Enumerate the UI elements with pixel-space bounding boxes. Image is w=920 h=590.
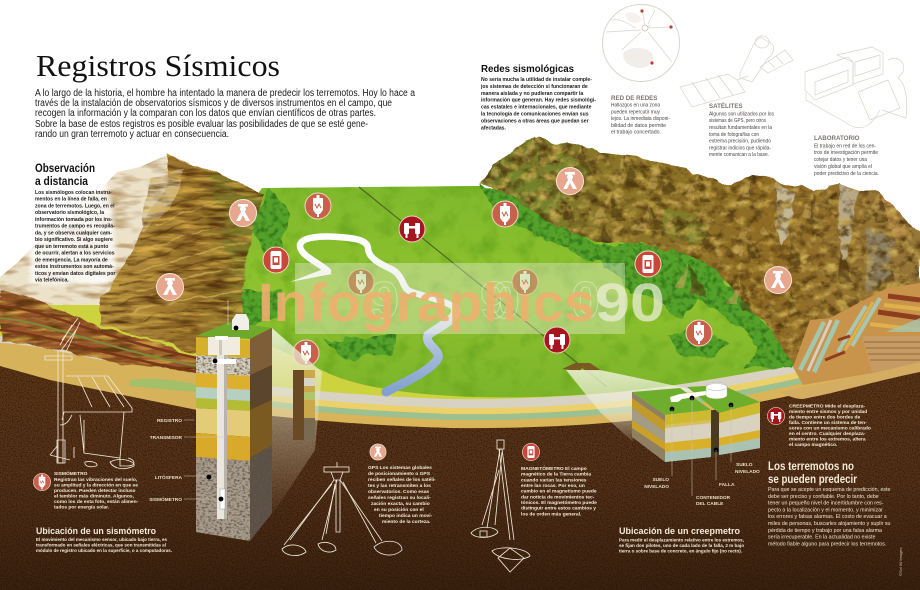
panel: Magnetómetro: los de orden más general.	[521, 511, 582, 517]
panel: Laboratorio: poder predictivo de la ciencia.	[814, 171, 879, 177]
panel: Observación a distancia: trumentos de campo es recopila-	[35, 224, 115, 230]
panel: Observación a distancia: de emergencia. La mayoría de	[35, 258, 108, 264]
green top	[196, 322, 272, 339]
panel: Sismómetro: SISMÓMETRO	[54, 469, 88, 477]
panel: Los terremotos no se pueden predecir: pecto a la localización y el momento, y minimizar	[768, 507, 883, 513]
panel: Los terremotos no se pueden predecir: pérdida de tiempo y trabajo por una falsa alarma	[768, 528, 882, 534]
hut	[232, 314, 249, 330]
panel: GPS: GPS Los sistemas globales	[368, 465, 432, 471]
image credit: ©Sol 90 Images	[898, 547, 903, 576]
panel: Sismómetro	[33, 469, 139, 510]
panel: Redes sismológicas: la tecnología de comunicaciones envían sus	[481, 112, 589, 118]
panel: Red de redes: bilidad de datos permite	[611, 123, 666, 129]
panel: Sismómetro: tados por energía solar.	[54, 504, 110, 510]
panel: Laboratorio: tros de investigación permite	[814, 150, 878, 156]
panel: Redes sismológicas: afectadas.	[481, 125, 507, 131]
panel: Laboratorio: LABORATORIO	[814, 135, 860, 142]
panel: Satélites: Algunos son utilizados por los	[709, 112, 774, 118]
panel: Los terremotos no se pueden predecir: los errores y falsas alarmas. El costo de evacuar a	[768, 514, 887, 520]
intro text: rando un gran terremoto y actuar en consecuencia.	[35, 129, 229, 140]
panel: Ubicación de un creepmetro: se fijan dos pilotes, uno de cada lado de la falla, 2 m bajo	[619, 543, 744, 548]
right mountains	[480, 136, 920, 368]
left block	[632, 388, 711, 415]
icon: laboratory workstation	[805, 47, 907, 128]
panel: Los terremotos no se pueden predecir: miles de personas, buscarles alojamiento y suplir su	[768, 521, 891, 527]
panel: Creepmetro: el campo magnético.	[789, 442, 838, 448]
panel: Ubicación de un sismómetro	[36, 526, 172, 553]
icon: world map globe	[602, 4, 680, 82]
panel: Observación a distancia: de ocurrir, alertan a los servicios	[35, 251, 115, 257]
front strata	[196, 337, 250, 358]
panel: Observación a distancia: ticos y envían datos digitales por	[35, 271, 115, 277]
panel: Observación a distancia: información tomada por los ins-	[35, 217, 113, 223]
panel: Observación a distancia: mentos en la línea de falla, en	[35, 197, 107, 203]
panel: Magnetómetro: tónicos. El magnetómetro puede	[521, 500, 597, 506]
panel: Creepmetro: de tiempo entre dos bordes de	[789, 414, 860, 420]
creepmeter block diagram	[632, 382, 760, 462]
intro text: recogen la información y la comparan con los datos que envían científicos de otras partes.	[35, 108, 376, 119]
olive slopes	[490, 150, 710, 245]
panel: Redes sismológicas: manera aislada y no pudieran compartir la	[481, 91, 583, 97]
panel: GPS: zación exacta, su cambio	[371, 501, 430, 507]
panel: Red de redes	[611, 95, 670, 136]
text halo	[30, 162, 116, 284]
fault line	[359, 187, 607, 387]
panel: Redes sismológicas: jos sistemas de detección si funcionaran de	[480, 84, 588, 90]
dots	[234, 326, 238, 330]
panel: Observación a distancia: bio significativo. Si algo sugiere	[35, 237, 113, 243]
creepmeter labels: SUELO	[736, 462, 753, 468]
right sand edge	[780, 362, 920, 399]
panel: Creepmetro: CREEPMETRO Mide el desplaza-	[789, 404, 865, 410]
panel: Los terremotos no se pueden predecir: debe ser preciso y confiable. Por lo tanto, debe	[768, 494, 879, 500]
creepmeter labels: SUELO	[652, 477, 669, 483]
intro text: A lo largo de la historia, el hombre ha intentado la manera de predecir los terremotos. Hoy lo hace a	[35, 88, 416, 99]
panel: Creepmetro: miento entre sismos y por unidad	[789, 409, 867, 415]
panel: GPS: de posicionamiento o GPS	[368, 471, 431, 477]
panel: Ubicación de un creepmetro: Para medir el desplazamiento relativo entre los extremos,	[619, 538, 744, 542]
intro text	[35, 88, 416, 140]
watermark: Infographics	[258, 273, 595, 333]
panel: Sismómetro: Registran las vibraciones del suelo,	[54, 477, 138, 483]
watermark: 90	[595, 273, 665, 333]
panel: Creepmetro: falla. Contiene un sistema de ten-	[789, 420, 867, 426]
panel: Magnetómetro	[521, 443, 597, 517]
seismometer block diagram	[196, 300, 322, 541]
left pale mountains	[0, 155, 190, 305]
panel: Magnetómetro: entre las rocas. Por eso, un	[521, 483, 585, 489]
watermark: 90	[370, 272, 520, 330]
panel: Observación a distancia: a distancia	[35, 174, 88, 188]
panel: GPS	[368, 444, 436, 525]
panel: Creepmetro	[767, 404, 871, 448]
panel: GPS: en su posición con el	[374, 507, 424, 513]
dots	[670, 407, 674, 411]
creepmeter labels	[644, 398, 760, 507]
ridge shadows	[500, 136, 897, 316]
panel: Los terremotos no se pueden predecir: método fiable alguno para predecir los terremotos.	[768, 541, 886, 547]
creepmeter labels: NIVELADO	[735, 469, 760, 475]
panel: Observación a distancia: zona de terremotos. Luego, en el	[35, 204, 115, 210]
panel: GPS: tes y las retransmiten a los	[368, 483, 431, 489]
panel: Satélites: SATÉLITES	[709, 102, 743, 110]
panel: Los terremotos no se pueden predecir: se pueden predecir	[768, 474, 857, 486]
panel: GPS: tiempo indica un movi-	[379, 513, 433, 519]
river	[290, 237, 456, 392]
panel: Laboratorio: cotejar datos y tener una	[814, 157, 867, 163]
panel: Redes sismológicas: Redes sismológicas	[481, 64, 574, 75]
panel: Los terremotos no se pueden predecir: sería irrecuperable. En la actualidad no existe	[768, 535, 876, 541]
panel: Red de redes: pueden repercutir muy	[611, 109, 660, 115]
icon: GPS tripod	[282, 462, 402, 556]
icon: magnetometer stake	[471, 440, 530, 572]
panel: Laboratorio: visión global que amplía el	[814, 164, 872, 170]
seismometer labels: TRANSMISOR	[150, 435, 183, 441]
right face	[250, 328, 272, 541]
panel: GPS: señales registran su locali-	[368, 495, 431, 501]
panel: Magnetómetro: cuando varían las tensiones	[521, 477, 587, 483]
right striped rock outcrop	[793, 283, 920, 385]
creepmeter labels: CONTENEDOR	[696, 495, 731, 501]
panel: GPS: miento de la corteza.	[382, 519, 431, 525]
creepmeter labels: FALLA	[719, 482, 735, 488]
seismometer labels	[149, 418, 226, 503]
map icons on terrain	[156, 168, 792, 366]
panel: Laboratorio: El trabajo en red de los cen-	[814, 144, 876, 150]
right block	[687, 385, 760, 413]
panel: Satélites: sistemas de GPS, pero otros	[709, 118, 766, 124]
terrain strata bands	[0, 280, 920, 428]
fault excavation	[562, 363, 602, 371]
panel: Satélites: toma de fotografías con	[709, 132, 759, 138]
forest patches	[240, 186, 800, 370]
panel: Satélites: resultan fundamentales en la	[709, 125, 772, 131]
title: Registros Sísmicos	[36, 48, 280, 83]
panel: Red de redes: RED DE REDES	[611, 95, 657, 102]
panel: Sismómetro: el temblor más diminuto. Algunos,	[54, 494, 135, 500]
panel: Redes sismológicas: No sería mucha la utilidad de instalar comple-	[481, 77, 592, 83]
beam beside block	[272, 328, 322, 515]
sensor	[220, 489, 225, 509]
panel: GPS: observatorios. Como esas	[368, 489, 429, 495]
creepmeter labels: DEL CABLE	[696, 501, 724, 507]
panel: Ubicación de un creepmetro: tierra o sobre base de concreto, en ángulo fijo (no recto).	[619, 548, 742, 554]
panel: Ubicación de un creepmetro: Ubicación de un creepmetro	[619, 526, 740, 537]
panel: Los terremotos no se pueden predecir: Los terremotos no	[768, 461, 854, 473]
left front strata	[0, 290, 197, 410]
fault gap	[711, 410, 719, 457]
left brown mountains	[100, 155, 262, 352]
panel: Sismómetro: producen. Pueden detectar incluso	[54, 488, 136, 494]
icon: solar panel station	[45, 318, 134, 469]
panel: Los terremotos no se pueden predecir: Para que se acepte un esquema de predicción, este	[768, 487, 891, 493]
panel: Magnetómetro: dar noticia de movimientos tec-	[521, 494, 595, 500]
panel: Redes sismológicas: información que generan. Hay redes sismológi-	[481, 98, 596, 104]
panel: Observación a distancia: que un terremoto está a punto	[35, 244, 108, 250]
panel: Magnetómetro: distinguir entre estos cambios y	[521, 506, 596, 512]
creepmeter labels: NIVELADO	[644, 484, 669, 490]
terrace ridges	[112, 195, 245, 325]
panel: Los terremotos no se pueden predecir	[768, 461, 891, 547]
panel: Red de redes: Hallazgos en una zona	[611, 102, 660, 108]
panel: Los terremotos no se pueden predecir: tener un pequeño nivel de incertidumbre con res-	[768, 501, 884, 507]
pale grey rock faces	[776, 182, 795, 245]
panel: Red de redes: lejos. La inmediata disponi-	[611, 116, 670, 122]
panel: Sismómetro: su amplitud y la dirección en que se	[54, 482, 138, 488]
panel: Satélites: extrema precisión, pudiendo	[709, 138, 771, 144]
panel: Ubicación de un sismómetro: transformado en señales eléctricas, que son transmitidas al	[36, 542, 166, 548]
panel: Observación a distancia	[35, 161, 115, 284]
panel: Satélites: mente comunican a la base.	[709, 152, 769, 158]
green valley	[230, 186, 800, 397]
underground earth	[0, 340, 920, 590]
panel: Observación a distancia: observatorio sismológico, la	[35, 210, 104, 216]
watermark: 90	[480, 272, 600, 330]
intro text: Sobre la base de estos registros es posible evaluar las posibilidades de que se esté gene-	[35, 119, 368, 130]
panel: Red de redes: el trabajo concertado.	[611, 130, 661, 136]
panel: Redes sismológicas	[480, 64, 596, 131]
panel: Satélites: registrar indicios que rápida-	[709, 146, 771, 152]
panel: Ubicación de un sismómetro: módulo de registro ubicado en la superficie, o a computadoras.	[36, 548, 172, 553]
watermark	[258, 263, 665, 334]
seismometer labels: REGISTRO	[157, 418, 182, 424]
panel: Observación a distancia: Los sismólogos colocan instru-	[35, 190, 112, 196]
panel: Observación a distancia: estos instrumentos son automá-	[35, 264, 114, 270]
panel: Ubicación de un sismómetro: El movimiento del mecanismo sensor, ubicado bajo tierra, es	[36, 537, 167, 542]
ridge highlights	[486, 136, 880, 306]
small rear column	[293, 370, 315, 440]
panel: Magnetómetro: MAGNETÓMETRO El campo	[521, 464, 587, 472]
seismometer labels: LITÓSFERA	[155, 473, 183, 481]
panel: Redes sismológicas: cas estatales e internacionales, que mediante	[481, 105, 592, 111]
panel: Redes sismológicas: observaciones a otras áreas que puedan ser	[481, 118, 589, 124]
panel: Observación a distancia: vía telefónica.	[35, 278, 69, 284]
instrument	[670, 391, 706, 402]
panel: Ubicación de un creepmetro	[619, 526, 744, 554]
panel: Laboratorio	[814, 135, 879, 177]
seismometer labels: SISMÓMETRO	[149, 495, 182, 503]
panel: Creepmetro: en el centro. Cualquier desplaza-	[789, 431, 866, 437]
panel: GPS: reciben señales de los satéli-	[368, 477, 436, 483]
light beam to creepmeter block	[566, 370, 705, 442]
shaft	[208, 337, 240, 355]
icon: satellite	[680, 36, 793, 107]
panel: Ubicación de un sismómetro: Ubicación de un sismómetro	[36, 526, 156, 537]
intro text: través de la instalación de observatorios sísmicos y de diversos instrumentos en el campo, que	[35, 98, 392, 109]
panel: Magnetómetro: cambio en el magnetismo puede	[521, 489, 597, 495]
panel: Observación a distancia: Observación	[35, 161, 95, 175]
panel: Creepmetro: sores con un mecanismo calibrado	[789, 426, 871, 432]
panel: Creepmetro: miento entre los extremos, altera	[789, 436, 866, 442]
panel: Satélites	[709, 102, 774, 158]
panel: Sismómetro: como los de esta foto, están alimen-	[54, 499, 139, 505]
panel: Magnetómetro: magnético de la Tierra cambia	[521, 472, 591, 478]
panel: Observación a distancia: da, y se observa cualquier cam-	[35, 230, 112, 236]
